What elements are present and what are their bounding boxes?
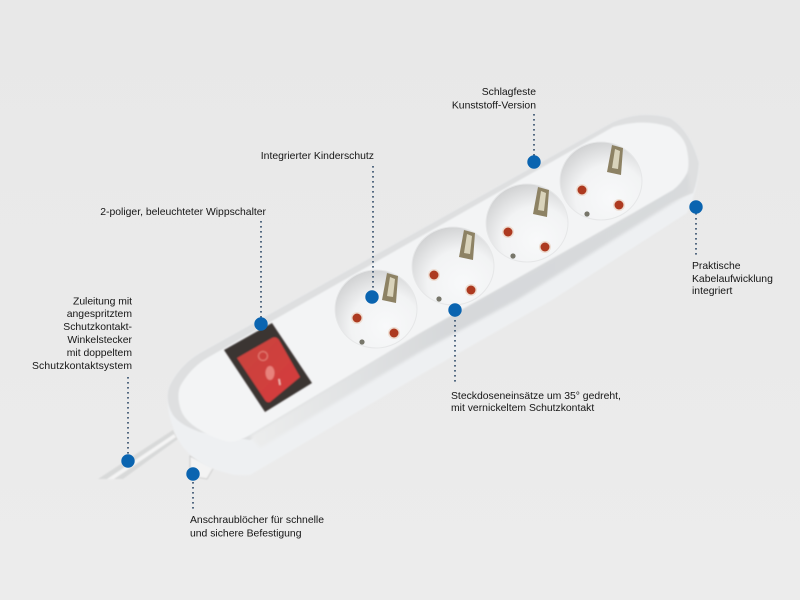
callout: Anschraublöcher <box>186 467 324 540</box>
callout: Zuleitung: Zuleitung mit <box>73 296 132 308</box>
socket 4 <box>560 142 642 220</box>
callout: Zuleitung <box>32 296 135 468</box>
callout: Integrierter Kinderschutz <box>261 151 379 304</box>
callout: Zuleitung: Schutzkontaktsystem <box>32 361 132 372</box>
callout: Zuleitung: mit doppeltem <box>67 348 132 359</box>
housing rim <box>168 115 699 440</box>
housing top face <box>178 122 688 442</box>
callout: Zuleitung: Winkelstecker <box>67 335 133 346</box>
callout: Zuleitung: Schutzkontakt- <box>63 322 132 333</box>
callout: Steckdoseneinsätze: mit vernickeltem Schutzkontakt <box>451 403 594 414</box>
callout: Schlagfeste Kunststoff-Version: Kunststoff-Version <box>452 100 536 112</box>
callout: Kabelaufwicklung: Kabelaufwicklung <box>692 274 773 285</box>
rocker switch <box>224 323 312 412</box>
callout: Kabelaufwicklung <box>689 200 773 297</box>
callout: Kabelaufwicklung: integriert <box>692 286 733 297</box>
callout: Steckdoseneinsätze: Steckdoseneinsätze um 35° gedreht, <box>451 391 621 402</box>
housing darker side band <box>250 172 690 448</box>
socket 3 <box>486 184 568 262</box>
callout: Integrierter Kinderschutz: Integrierter Kinderschutz <box>261 151 374 162</box>
callout: Anschraublöcher: und sichere Befestigung <box>190 528 302 540</box>
callout: Kabelaufwicklung: Praktische <box>692 261 741 272</box>
socket 1 <box>335 270 417 348</box>
housing outer shell <box>168 115 699 475</box>
callout: Schlagfeste Kunststoff-Version <box>452 87 541 169</box>
callout: Wippschalter <box>100 207 268 331</box>
cable <box>98 430 178 479</box>
callout: Steckdoseneinsätze <box>448 303 621 414</box>
socket 2 <box>412 227 494 305</box>
callout: Zuleitung: angespritztem <box>67 309 132 320</box>
callout: Schlagfeste Kunststoff-Version: Schlagfeste <box>482 87 536 98</box>
callout: Anschraublöcher: Anschraublöcher für schnelle <box>190 515 324 526</box>
mounting lug <box>190 456 214 479</box>
power strip product photo <box>98 115 699 479</box>
callout: Wippschalter: 2-poliger, beleuchteter Wippschalter <box>100 207 267 218</box>
